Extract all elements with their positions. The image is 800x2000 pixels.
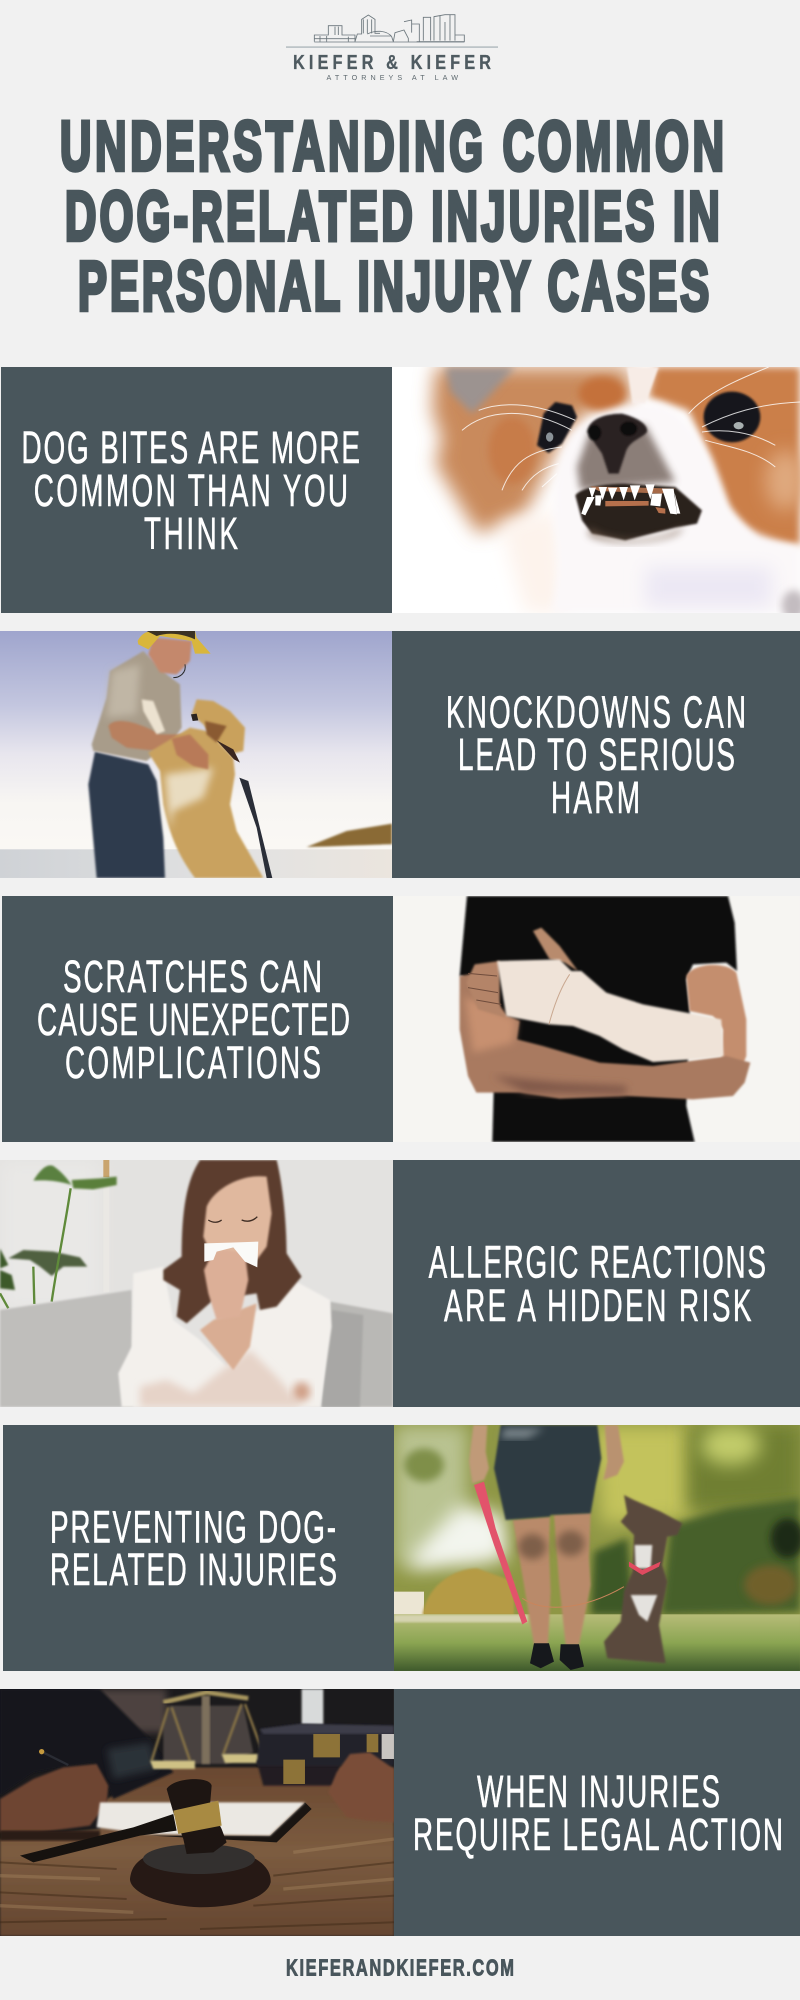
icon: city skyline (314, 15, 464, 42)
man shirt (92, 651, 182, 761)
man hand (172, 734, 208, 769)
rule (286, 46, 498, 48)
dog eyes (537, 392, 760, 453)
text panel: WHEN INJURIES (477, 1766, 720, 1817)
title: UNDERSTANDING COMMON (60, 107, 724, 186)
wood post (103, 1160, 109, 1177)
crossed forearm (460, 973, 750, 1099)
photo: person walking dog (394, 1425, 800, 1671)
man head (148, 638, 192, 674)
logo: Kiefer & Kiefer (286, 15, 498, 82)
text panel: SCRATCHES CAN (63, 951, 322, 1002)
legs (513, 1517, 551, 1645)
text panel: CAUSE UNEXPECTED (37, 994, 350, 1045)
photo: man with golden retriever (0, 631, 392, 878)
thumb (533, 928, 578, 971)
text panel: RELATED INJURIES (50, 1544, 337, 1595)
title: DOG-RELATED INJURIES IN (65, 177, 720, 256)
plant (0, 1165, 117, 1308)
panel: scratches (2, 896, 800, 1142)
photo: bandaged arm (458, 896, 752, 1142)
dog head (192, 699, 245, 754)
text panel (392, 631, 800, 878)
tagline: ATTORNEYS AT LAW (326, 73, 458, 82)
photo: woman with tissue (0, 1160, 393, 1407)
panel: legal action (0, 1689, 800, 1936)
text panel: REQUIRE LEGAL ACTION (413, 1809, 783, 1860)
face (203, 1176, 272, 1260)
shorts (494, 1425, 601, 1520)
dog mouth (575, 484, 702, 540)
firm name: KIEFER & KIEFER (293, 50, 491, 73)
fingers (468, 960, 502, 1016)
tissue (204, 1242, 258, 1267)
title (60, 107, 724, 326)
hand (204, 1250, 248, 1320)
panel: preventing injuries (3, 1425, 800, 1671)
dog body (148, 728, 263, 878)
right upper arm (686, 965, 746, 1073)
books (257, 1761, 340, 1786)
leash (239, 778, 272, 878)
shirt (460, 896, 737, 1142)
shoes (530, 1643, 584, 1670)
robe (118, 1267, 332, 1407)
text panel: ARE A HIDDEN RISK (444, 1280, 752, 1331)
chest (200, 1303, 257, 1370)
table (0, 1767, 394, 1936)
gavel (20, 1779, 271, 1907)
left hand (0, 1764, 108, 1832)
text panel (394, 1689, 800, 1936)
panel: allergic reactions (0, 1160, 800, 1407)
jacket (0, 1689, 173, 1799)
text panel: KNOCKDOWNS CAN (446, 687, 746, 737)
hair (163, 1160, 302, 1323)
text panel: HARM (551, 772, 640, 823)
text panel: THINK (144, 508, 238, 559)
photo: gavel on desk (0, 1689, 394, 1936)
leash (474, 1482, 527, 1624)
man trousers (88, 752, 165, 878)
text panel (393, 1160, 800, 1407)
hat (138, 631, 211, 654)
text panel (1, 367, 392, 613)
photo: snarling dog (392, 367, 800, 620)
dog (604, 1495, 682, 1663)
scales of justice (150, 1692, 267, 1769)
document (150, 1802, 312, 1842)
sofa (0, 1290, 133, 1407)
man arm (108, 720, 182, 751)
grass (394, 1614, 800, 1671)
text panel (2, 896, 393, 1142)
text panel (3, 1425, 394, 1671)
text panel: PREVENTING DOG- (50, 1502, 336, 1552)
panel: knockdowns (0, 631, 800, 878)
right hand (328, 1752, 394, 1822)
arms (469, 1425, 489, 1483)
text panel: DOG BITES ARE MORE (22, 422, 360, 473)
text panel: LEAD TO SERIOUS (458, 729, 735, 780)
dog paw (142, 699, 165, 734)
whiskers (462, 367, 800, 490)
text panel: ALLERGIC REACTIONS (429, 1237, 766, 1287)
footer website: KIEFERANDKIEFER.COM (286, 1956, 514, 1981)
text panel: COMPLICATIONS (65, 1037, 321, 1088)
text panel: COMMON THAN YOU (34, 465, 348, 516)
panel: dog bites (1, 367, 800, 620)
dog nose (587, 414, 647, 474)
title: PERSONAL INJURY CASES (78, 247, 709, 326)
lace (140, 1350, 300, 1407)
bandage (497, 959, 724, 1062)
